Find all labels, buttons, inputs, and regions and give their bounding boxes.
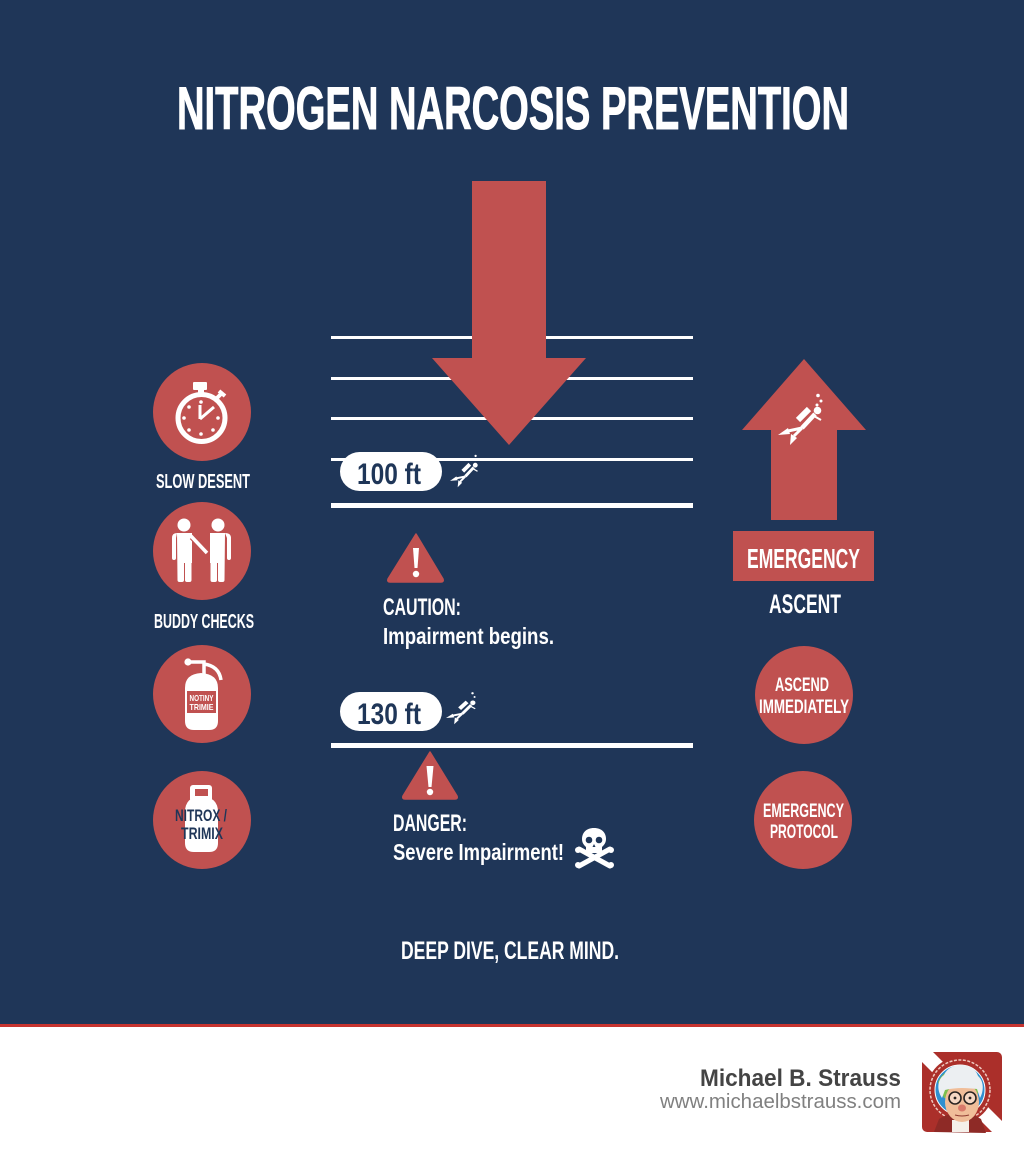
icon: ascending diver — [778, 394, 822, 445]
icon: nitrox trimix tank: TRIMIX — [181, 824, 223, 843]
footer — [0, 1024, 1024, 1154]
author name: Michael B. Strauss — [700, 1065, 901, 1092]
danger text: DANGER: — [393, 810, 467, 837]
icon: gas tank: NOTINY — [190, 693, 214, 703]
badge: emergency protocol: EMERGENCY — [763, 800, 844, 822]
badge: ascend immediately: ASCEND — [775, 674, 829, 696]
icon: gas tank — [153, 645, 251, 743]
caution block — [383, 534, 554, 649]
icon: stopwatch — [153, 363, 251, 461]
icon: danger triangle — [403, 752, 457, 799]
impairment text: Impairment begins. — [383, 623, 554, 649]
icon: diver at 130 ft — [446, 692, 476, 724]
icon: skull and crossbones — [575, 828, 614, 868]
icon: gas tank: TRIMIE — [190, 702, 214, 712]
banner: emergency — [733, 531, 874, 581]
badge: emergency protocol: PROTOCOL — [770, 821, 838, 843]
icon: nitrox trimix tank — [153, 771, 251, 869]
banner: emergency: EMERGENCY — [747, 543, 860, 574]
depth lines — [331, 336, 693, 748]
website: www.michaelbstrauss.com — [659, 1091, 901, 1113]
icon: caution triangle — [388, 534, 443, 582]
icon: buddy pair — [153, 502, 251, 600]
panel: prevention measures — [153, 363, 254, 869]
badge: emergency protocol — [754, 771, 852, 869]
icon: nitrox trimix tank: NITROX / — [175, 806, 227, 825]
arrow: descent — [432, 181, 586, 445]
logo — [921, 1051, 1003, 1133]
badge: 130 ft: 130 ft — [357, 698, 421, 731]
badge: ascend immediately — [755, 646, 853, 744]
arrow: emergency ascent — [742, 359, 866, 520]
badge: 100 ft — [340, 452, 442, 491]
tagline: DEEP DIVE, CLEAR MIND. — [401, 937, 619, 965]
icon: diver at 100 ft — [450, 455, 478, 487]
label: slow descent: SLOW DESENT — [156, 471, 250, 493]
caution text: CAUTION: — [383, 594, 461, 621]
badge: ascend immediately: IMMEDIATELY — [759, 696, 849, 718]
label: buddy checks: BUDDY CHECKS — [154, 611, 254, 633]
danger block — [393, 752, 614, 868]
severe impairment text: Severe Impairment! — [393, 839, 564, 865]
label: ascent: ASCENT — [769, 589, 841, 619]
badge: 100 ft: 100 ft — [357, 458, 421, 491]
badge: 130 ft — [340, 692, 442, 731]
